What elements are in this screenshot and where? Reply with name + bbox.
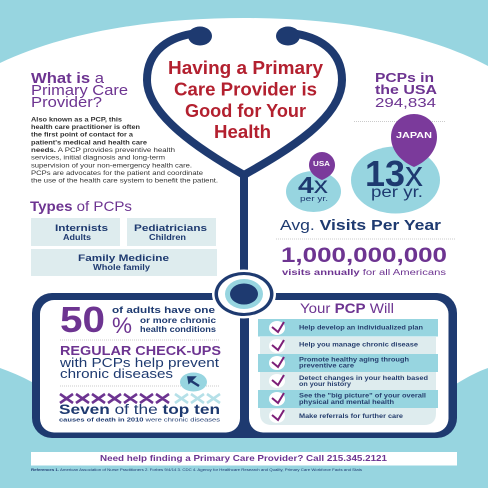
Japan 13x bubble: JAPAN (396, 130, 432, 140)
50 percent stat: of adults have one (112, 305, 215, 315)
center ring (212, 270, 276, 318)
50 percent stat (60, 299, 217, 340)
stethoscope heart (147, 26, 342, 296)
what is a PCP text: the use of the health care system to benefit the patient. (31, 178, 218, 184)
title: Good for Your (185, 100, 306, 121)
checklist: physical and mental health (299, 399, 394, 406)
Japan 13x bubble (351, 114, 440, 214)
what is a PCP heading: Primary Care (31, 83, 128, 99)
what is a PCP text: supervision of your non-emergency health care. (31, 162, 192, 170)
USA 4x bubble (286, 152, 341, 212)
types of PCPs heading: Types of PCPs (30, 198, 132, 214)
references: References 1. American Association of Nurse Practitioners 2. Forbes 9/4/14 3. CDC 4. Agency for Healthcare Research and Quality, Primary Care Workforce Facts and Stats (31, 468, 362, 472)
what is a PCP text: Also known as a PCP, this (31, 116, 123, 124)
USA 4x bubble: 4x (298, 172, 329, 198)
checklist: on your history (299, 381, 352, 388)
what is a PCP text: services, initial diagnosis and long-term (31, 154, 165, 162)
seven of top ten: causes of death in 2010 were chronic diseases (59, 418, 220, 424)
50 percent stat: health conditions (140, 325, 217, 334)
checklist: Help you manage chronic disease (299, 342, 419, 349)
what is a PCP text: health care practitioner is often (31, 124, 140, 131)
regular check-ups text: with PCPs help prevent (59, 356, 220, 370)
checklist (258, 319, 438, 425)
checklist: See the "big picture" of your overall (299, 393, 426, 400)
title: Having a Primary (168, 57, 324, 78)
PCPs in the USA (375, 71, 437, 110)
what is a PCP text: the first point of contact for a (31, 132, 134, 138)
type: internists: Internists (55, 223, 108, 234)
what is a PCP heading (31, 71, 128, 111)
seven of top ten (59, 402, 220, 424)
USA 4x bubble: USA (313, 161, 330, 168)
call to action banner: Need help finding a Primary Care Provider? Call 215.345.2121 (100, 453, 387, 463)
type: family medicine (31, 249, 217, 276)
what is a PCP text: needs. A PCP provides preventive health (31, 147, 176, 154)
one billion visits: 1,000,000,000 (281, 244, 447, 267)
seven of top ten: Seven of the top ten (59, 402, 220, 417)
one billion visits: visits annually for all Americans (282, 268, 446, 277)
what is a PCP heading: Provider? (31, 95, 102, 111)
checklist: Help develop an individualized plan (299, 324, 423, 332)
regular check-ups text: REGULAR CHECK-UPS (60, 344, 221, 358)
call to action banner (31, 452, 457, 466)
checklist: Detect changes in your health based (299, 375, 428, 382)
checklist: Promote healthy aging through (299, 357, 409, 364)
one billion visits (281, 244, 447, 277)
type: pediatricians: Pediatricians (134, 223, 207, 234)
USA 4x bubble: per yr. (300, 194, 328, 203)
what is a PCP text (31, 116, 218, 184)
checklist: Make referrals for further care (299, 413, 404, 420)
type: family medicine: Whole family (93, 263, 151, 272)
regular check-ups text: chronic diseases (60, 367, 173, 381)
Japan 13x bubble: per yr. (371, 184, 423, 201)
ten crosses (60, 394, 220, 403)
50 percent stat: 50 (60, 299, 105, 340)
what is a PCP text: PCPs are advocates for the patient and coordinate (31, 170, 204, 177)
what is a PCP text: patient's medical and health care (31, 140, 148, 146)
regular check-ups text (59, 344, 221, 381)
what is a PCP heading: What is a (31, 71, 105, 87)
checklist: preventive care (299, 362, 355, 370)
type: pediatricians (127, 218, 216, 246)
type: internists (31, 218, 120, 246)
type: internists: Adults (63, 233, 92, 242)
title: Health (214, 121, 271, 142)
Japan 13x bubble: 13x (365, 153, 423, 194)
avg visits per year: Avg. Visits Per Year (280, 218, 441, 234)
type: family medicine: Family Medicine (78, 253, 169, 264)
type: pediatricians: Children (149, 233, 186, 242)
title: Care Provider is (174, 78, 317, 100)
50 percent stat: or more chronic (140, 316, 217, 325)
title (168, 57, 324, 142)
arrow icon (180, 372, 207, 392)
PCPs in the USA: 294,834 (375, 96, 436, 110)
panels frame (32, 293, 457, 438)
PCPs in the USA: the USA (375, 83, 437, 97)
your PCP will heading: Your PCP Will (300, 300, 394, 316)
50 percent stat: % (112, 313, 132, 338)
PCPs in the USA: PCPs in (375, 71, 434, 85)
